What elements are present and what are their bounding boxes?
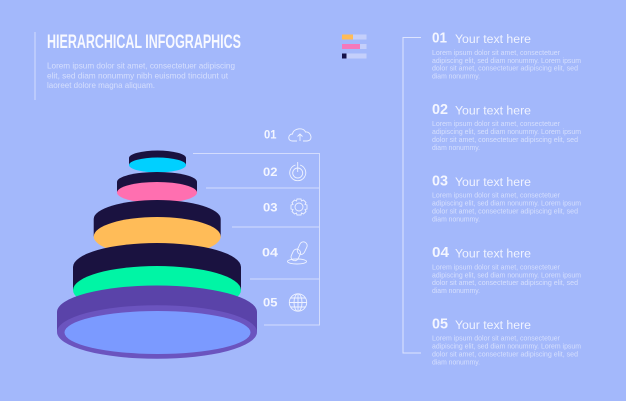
- right bracket: [403, 38, 421, 353]
- item 03: 03: [432, 174, 448, 190]
- item 02: Lorem ipsum dolor sit amet, consectetuer: [432, 119, 561, 128]
- title: HIERARCHICAL INFOGRAPHICS: [47, 32, 241, 53]
- item 04: 04: [432, 245, 449, 261]
- tier 5 base: [57, 286, 257, 359]
- tier 4: [73, 243, 241, 314]
- item 04: adipiscing elit, sed diam nonummy. Lorem ipsum: [432, 270, 581, 279]
- item 03: diam nonummy.: [432, 214, 480, 223]
- legend bars: [342, 34, 366, 58]
- item 01: 01: [432, 30, 447, 46]
- stacked cone pyramid: [57, 150, 257, 359]
- item 03: [432, 174, 581, 223]
- connector lines: [193, 154, 320, 325]
- item 02: 02: [432, 102, 448, 118]
- intro text: [47, 62, 235, 90]
- item 02: diam nonummy.: [432, 143, 480, 152]
- step labels: 03: [263, 200, 278, 214]
- item 01: dolor sit amet, consectetuer adipiscing elit, sed: [432, 64, 578, 72]
- icon: power: [290, 162, 306, 181]
- item 03: Lorem ipsum dolor sit amet, consectetuer: [432, 190, 561, 200]
- item 02: Your text here: [455, 106, 531, 118]
- item 01: [432, 30, 581, 80]
- item 05: [432, 316, 581, 366]
- icon: cloud upload: [289, 129, 311, 141]
- step labels: [262, 128, 278, 310]
- item 05: dolor sit amet, consectetuer adipiscing elit, sed: [432, 349, 578, 358]
- intro text: elit, sed diam nonummy nibh euismod tincidunt ut: [47, 72, 229, 80]
- step labels: 02: [263, 165, 278, 179]
- item 03: dolor sit amet, consectetuer adipiscing elit, sed: [432, 206, 578, 215]
- icon: chain link: [288, 241, 308, 264]
- icon: globe: [289, 294, 307, 311]
- step labels: 05: [263, 296, 278, 310]
- tier 3: [94, 200, 221, 256]
- item 05: diam nonummy.: [432, 357, 480, 366]
- item 04: [432, 245, 581, 295]
- intro text: Lorem ipsum dolor sit amet, consectetuer adipiscing: [47, 62, 235, 70]
- intro text: laoreet dolore magna aliquam.: [47, 81, 155, 90]
- item 05: Your text here: [455, 320, 531, 332]
- item 04: Your text here: [455, 248, 531, 260]
- item 02: dolor sit amet, consectetuer adipiscing elit, sed: [432, 135, 578, 144]
- item 01: diam nonummy.: [432, 72, 480, 80]
- item 03: adipiscing elit, sed diam nonummy. Lorem ipsum: [432, 198, 581, 208]
- item 04: dolor sit amet, consectetuer adipiscing elit, sed: [432, 278, 578, 287]
- tier 2: [117, 172, 197, 203]
- item 05: Lorem ipsum dolor sit amet, consectetuer: [432, 333, 561, 342]
- item 02: [432, 102, 581, 152]
- item 02: adipiscing elit, sed diam nonummy. Lorem ipsum: [432, 127, 581, 136]
- item 01: adipiscing elit, sed diam nonummy. Lorem ipsum: [432, 56, 581, 65]
- item 01: Your text here: [455, 34, 531, 46]
- item 03: Your text here: [455, 177, 531, 189]
- item 05: adipiscing elit, sed diam nonummy. Lorem ipsum: [432, 341, 581, 350]
- step labels: 04: [262, 246, 278, 260]
- item 05: 05: [432, 316, 448, 332]
- item 04: diam nonummy.: [432, 286, 480, 295]
- item 01: Lorem ipsum dolor sit amet, consectetuer: [432, 48, 561, 57]
- icon: gear: [291, 199, 307, 215]
- step labels: 01: [264, 128, 277, 142]
- header block: [35, 32, 241, 100]
- item 04: Lorem ipsum dolor sit amet, consectetuer: [432, 262, 561, 271]
- tier 1: [129, 150, 186, 172]
